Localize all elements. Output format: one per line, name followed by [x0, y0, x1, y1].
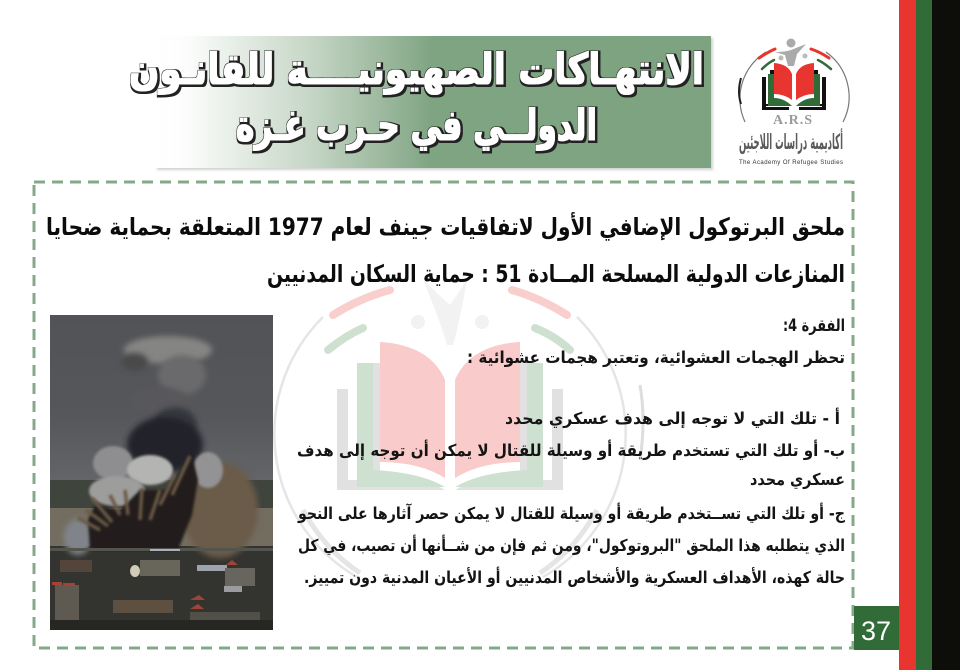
heading: المنازعات الدولية المسلحة المــادة 51 : حماية السكان المدنيين [267, 260, 845, 288]
intro line: تحظر الهجمات العشوائية، وتعتبر هجمات عشوائية : [467, 348, 845, 368]
watermark logo [274, 280, 643, 577]
item b: عسكري محدد [750, 470, 845, 490]
item b [297, 440, 845, 490]
item a: أ - تلك التي لا توجه إلى هدف عسكري محدد [505, 408, 840, 429]
page number [854, 606, 899, 650]
title panel [129, 36, 711, 168]
page number: 37 [861, 616, 891, 646]
logo [739, 38, 849, 166]
heading: ملحق البرتوكول الإضافي الأول لاتفاقيات جينف لعام 1977 المتعلقة بحماية ضحايا [46, 212, 845, 241]
item c: حالة كهذه، الأهداف العسكرية والأشخاص المدنيين أو الأعيان المدنية دون تمييز. [304, 567, 845, 588]
item b: ب- أو تلك التي تستخدم طريقة أو وسيلة للقتال لا يمكن أن توجه إلى هدف [297, 440, 845, 461]
title line 1: الانتهـاكات الصهيونيــــة للقانـون [129, 45, 704, 95]
paragraph label: الفقرة 4: [783, 316, 845, 336]
body text [297, 316, 845, 588]
side stripes [899, 0, 960, 670]
heading [46, 212, 845, 288]
dashed frame [34, 182, 853, 648]
item c: ج- أو تلك التي تســتخدم طريقة أو وسيلة للقتال لا يمكن حصر آثارها على النحو [297, 502, 845, 524]
title line 2: الدولــي في حـرب غـزة [236, 101, 597, 151]
logo letters: A.R.S [773, 113, 813, 128]
photo: explosion over city [50, 315, 273, 630]
logo caption: The Academy Of Refugee Studies [739, 160, 843, 166]
item c: الذي يتطلبه هذا الملحق "البروتوكول"، ومن ثم فإن من شــأنها أن تصيب، في كل [298, 535, 845, 556]
item c [297, 502, 845, 588]
